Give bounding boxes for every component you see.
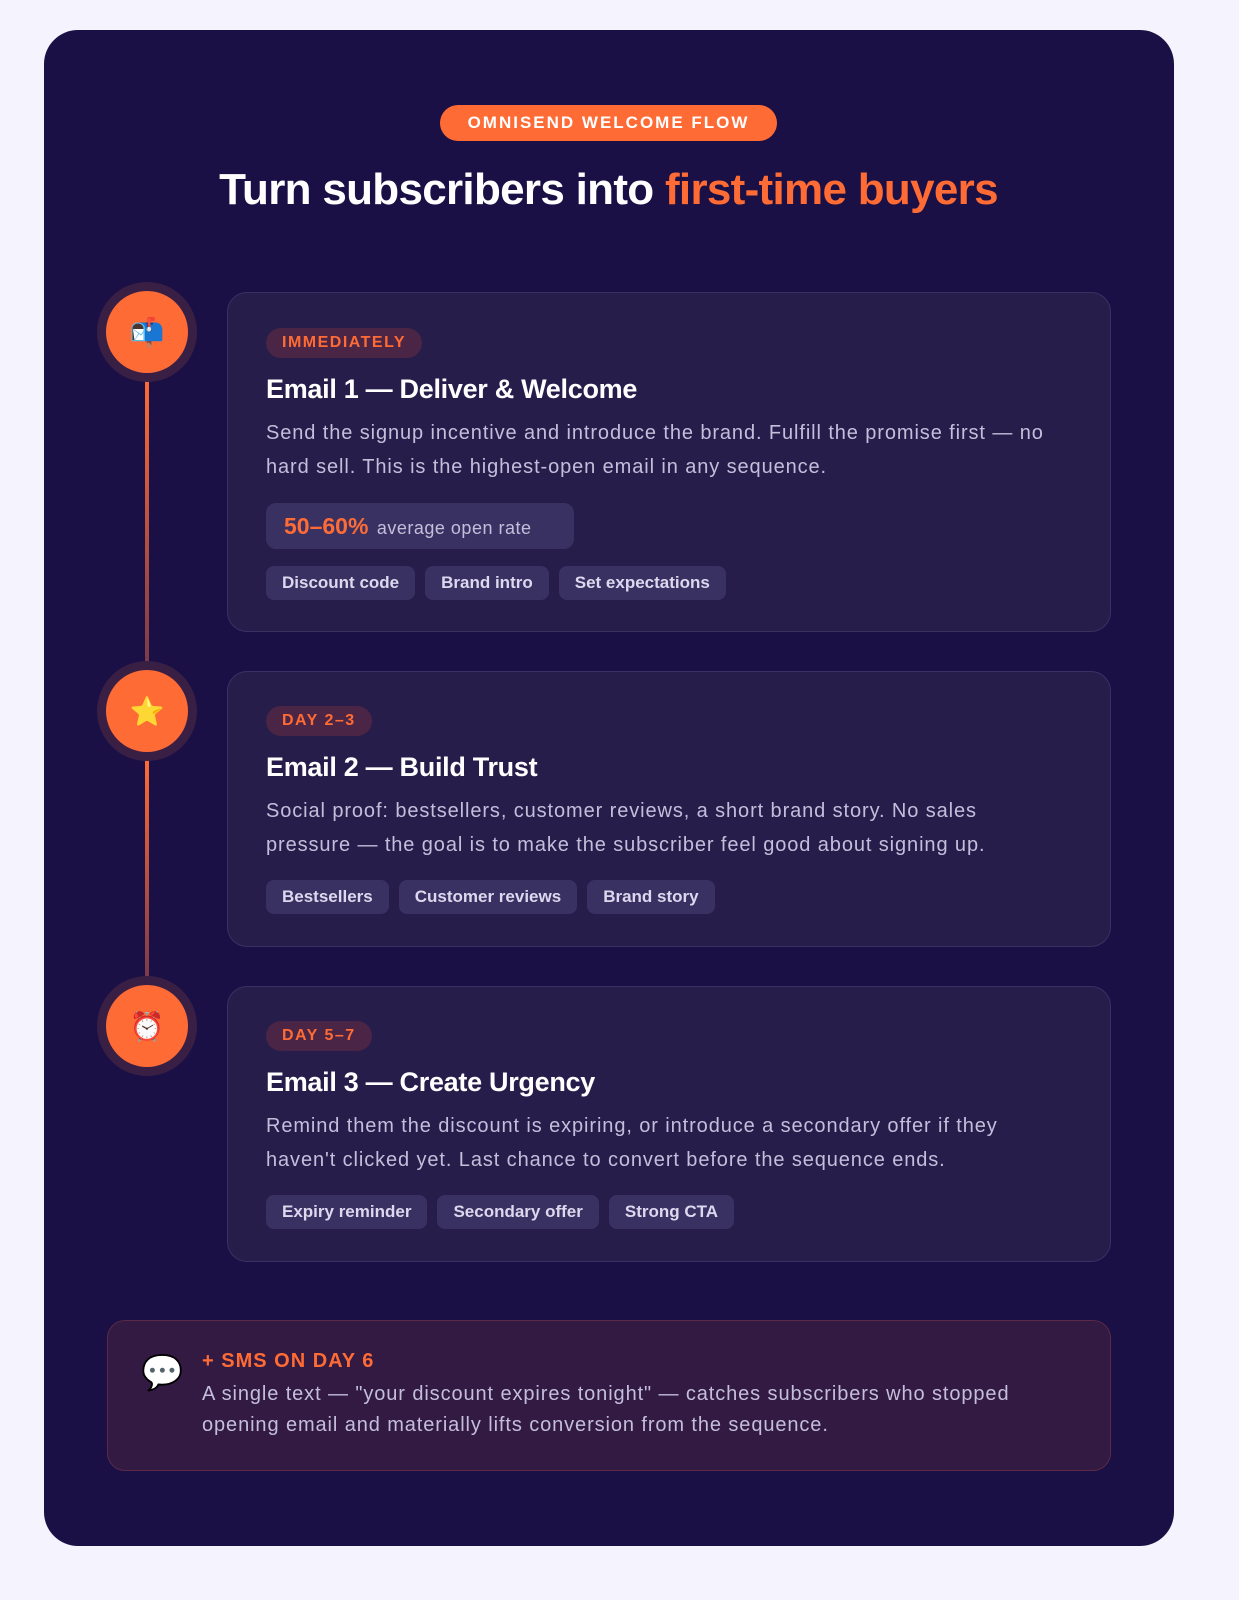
chips: Customer reviews: [415, 887, 561, 906]
body: Social proof: bestsellers, customer reviews, a short brand story. No sales pressure — the goal is to make the subscriber feel good about signing up.: [266, 800, 985, 856]
tag: IMMEDIATELY: [282, 334, 406, 351]
heading: Email 2 — Build Trust: [266, 752, 537, 782]
tag: [266, 706, 372, 736]
icon: mailbox: 📬: [130, 316, 164, 348]
icon: speech bubble: 💬: [141, 1354, 183, 1392]
heading: Email 1 — Deliver & Welcome: [266, 374, 637, 404]
chips: Set expectations: [575, 573, 710, 592]
chips: [266, 1195, 734, 1229]
stat: [266, 503, 574, 549]
body: Send the signup incentive and introduce the brand. Fulfill the promise first — no hard sell. This is the highest-open email in any sequence.: [266, 422, 1044, 478]
chips: Secondary offer: [453, 1202, 583, 1221]
tag: [266, 1021, 372, 1051]
panel: email 1: [227, 292, 1111, 632]
body: Remind them the discount is expiring, or introduce a secondary offer if they haven't clicked yet. Last chance to convert before the sequence ends.: [266, 1115, 998, 1171]
timeline line 1: [145, 378, 149, 664]
callout title: + SMS ON DAY 6: [202, 1350, 374, 1372]
callout body: A single text — "your discount expires tonight" — catches subscribers who stopped opening email and materially lifts conversion from the sequence.: [202, 1383, 1009, 1436]
chips: Strong CTA: [625, 1202, 718, 1221]
icon: star: [97, 661, 197, 761]
header pill: OMNISEND WELCOME FLOW: [468, 113, 749, 132]
tag: DAY 5–7: [282, 1027, 356, 1044]
chips: [266, 566, 726, 600]
chips: Expiry reminder: [282, 1202, 411, 1221]
header pill: [440, 105, 777, 141]
chips: [266, 880, 715, 914]
stat: 50–60% average open rate: [284, 513, 531, 539]
chips: Brand story: [603, 887, 699, 906]
title: Turn subscribers into first-time buyers: [219, 165, 998, 214]
chips: Bestsellers: [282, 887, 373, 906]
tag: DAY 2–3: [282, 712, 356, 729]
chips: Brand intro: [441, 573, 533, 592]
timeline line 2: [145, 758, 149, 978]
icon: alarm clock: [97, 976, 197, 1076]
callout: SMS: [107, 1320, 1111, 1471]
icon: alarm clock: ⏰: [130, 1010, 164, 1042]
heading: Email 3 — Create Urgency: [266, 1067, 595, 1097]
panel: email 3: [227, 986, 1111, 1262]
panel: email 2: [227, 671, 1111, 947]
icon: star: ⭐: [130, 696, 164, 726]
icon: mailbox: [97, 282, 197, 382]
tag: [266, 328, 422, 358]
chips: Discount code: [282, 573, 399, 592]
